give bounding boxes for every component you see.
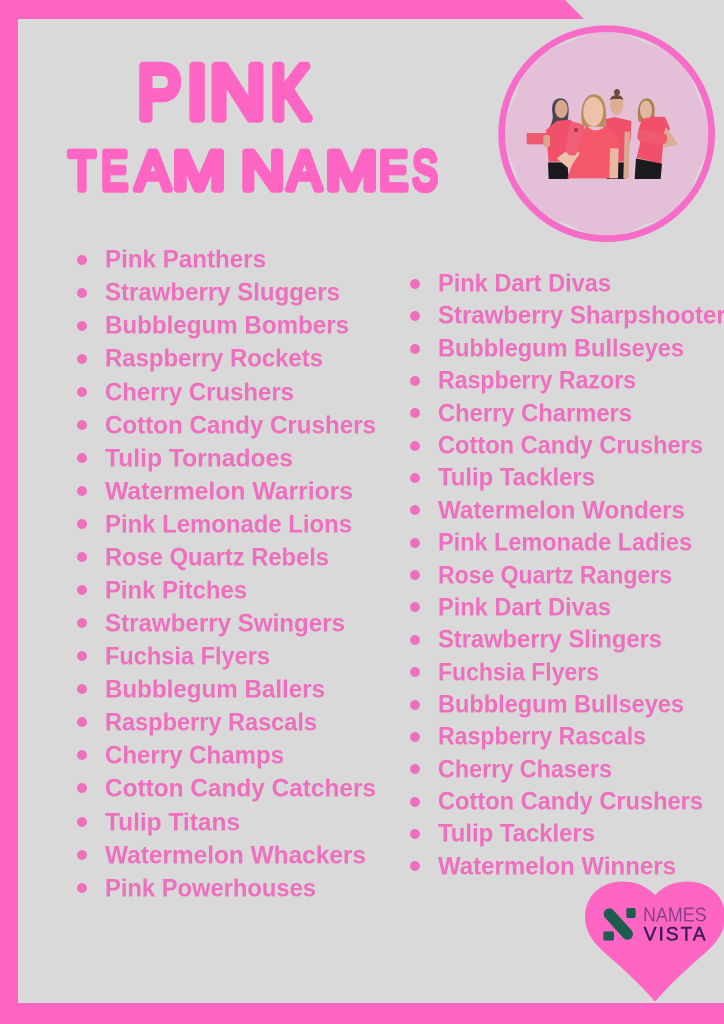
item: Pink Dart Divas: Pink Dart Divas xyxy=(438,593,611,621)
item: Pink Lemonade Lions: Pink Lemonade Lions xyxy=(105,510,352,538)
item: Pink Pitches: Pink Pitches xyxy=(105,576,247,604)
person: far right xyxy=(635,98,678,179)
title: Team Names: A xyxy=(288,140,322,202)
title: Team Names: T xyxy=(68,140,96,202)
item: Tulip Tacklers: Tulip Tacklers xyxy=(438,463,595,491)
logo mark xyxy=(603,908,636,941)
title: Team Names: N xyxy=(241,140,285,202)
item: Cherry Champs: Cherry Champs xyxy=(105,741,284,769)
list: right column xyxy=(410,269,724,880)
item: Watermelon Warriors: Watermelon Warriors xyxy=(105,477,353,505)
item: Rose Quartz Rebels: Rose Quartz Rebels xyxy=(105,543,329,571)
logo wordmark: NAMES xyxy=(643,905,707,927)
photo badge: team in pink shirts xyxy=(502,29,712,239)
item: Cotton Candy Crushers: Cotton Candy Crushers xyxy=(438,431,703,459)
item: Raspberry Rascals: Raspberry Rascals xyxy=(105,708,317,736)
item: Tulip Tornadoes: Tulip Tornadoes xyxy=(105,444,293,472)
item: Raspberry Rockets: Raspberry Rockets xyxy=(105,344,323,372)
item: Pink Lemonade Ladies: Pink Lemonade Ladies xyxy=(438,528,692,556)
item: Cherry Crushers: Cherry Crushers xyxy=(105,378,294,406)
item: Pink Panthers: Pink Panthers xyxy=(105,245,266,273)
item: Pink Dart Divas: Pink Dart Divas xyxy=(438,269,611,297)
item: Cotton Candy Crushers: Cotton Candy Crushers xyxy=(105,411,376,439)
list: left column xyxy=(77,245,376,902)
title: Pink: N xyxy=(210,50,266,136)
item: Cotton Candy Catchers: Cotton Candy Catchers xyxy=(105,774,376,802)
item: Watermelon Winners: Watermelon Winners xyxy=(438,852,676,880)
item: Bubblegum Ballers: Bubblegum Ballers xyxy=(105,675,325,703)
item: Watermelon Whackers: Watermelon Whackers xyxy=(105,841,366,869)
item: Cherry Chasers: Cherry Chasers xyxy=(438,755,612,783)
item: Watermelon Wonders: Watermelon Wonders xyxy=(438,496,685,524)
person: front centre with mat xyxy=(557,94,619,178)
item: Raspberry Razors: Raspberry Razors xyxy=(438,366,636,394)
item: Pink Powerhouses: Pink Powerhouses xyxy=(105,874,316,902)
heart logo badge: Names Vista: VISTA xyxy=(644,925,706,946)
heart shape xyxy=(585,882,724,1002)
title: Team Names: M xyxy=(172,140,226,202)
person: back right with bun xyxy=(606,89,631,179)
item: Strawberry Sluggers: Strawberry Sluggers xyxy=(105,278,340,306)
item: Bubblegum Bombers: Bubblegum Bombers xyxy=(105,311,349,339)
item: Strawberry Slingers: Strawberry Slingers xyxy=(438,625,662,653)
item: Cherry Charmers: Cherry Charmers xyxy=(438,399,632,427)
item: Bubblegum Bullseyes: Bubblegum Bullseyes xyxy=(438,690,684,718)
item: Tulip Tacklers: Tulip Tacklers xyxy=(438,819,595,847)
item: Fuchsia Flyers: Fuchsia Flyers xyxy=(105,642,270,670)
item: Raspberry Rascals: Raspberry Rascals xyxy=(438,722,646,750)
item: Tulip Titans: Tulip Titans xyxy=(105,808,240,836)
item: Cotton Candy Crushers: Cotton Candy Crushers xyxy=(438,787,703,815)
title: Team Names: S xyxy=(412,140,438,202)
title: Pink: I xyxy=(186,50,208,136)
item: Rose Quartz Rangers: Rose Quartz Rangers xyxy=(438,561,672,589)
item: Strawberry Swingers: Strawberry Swingers xyxy=(105,609,345,637)
title: Team Names: A xyxy=(136,140,170,202)
title: Pink: P xyxy=(138,50,181,136)
heart logo badge: Names Vista xyxy=(585,882,724,1002)
title: Pink: K xyxy=(271,50,310,136)
title: Team Names: E xyxy=(101,140,128,202)
person: far left xyxy=(527,98,577,179)
title: Team Names: E xyxy=(379,140,408,202)
item: Bubblegum Bullseyes: Bubblegum Bullseyes xyxy=(438,334,684,362)
title: Team Names: M xyxy=(326,140,378,202)
item: Fuchsia Flyers: Fuchsia Flyers xyxy=(438,658,599,686)
